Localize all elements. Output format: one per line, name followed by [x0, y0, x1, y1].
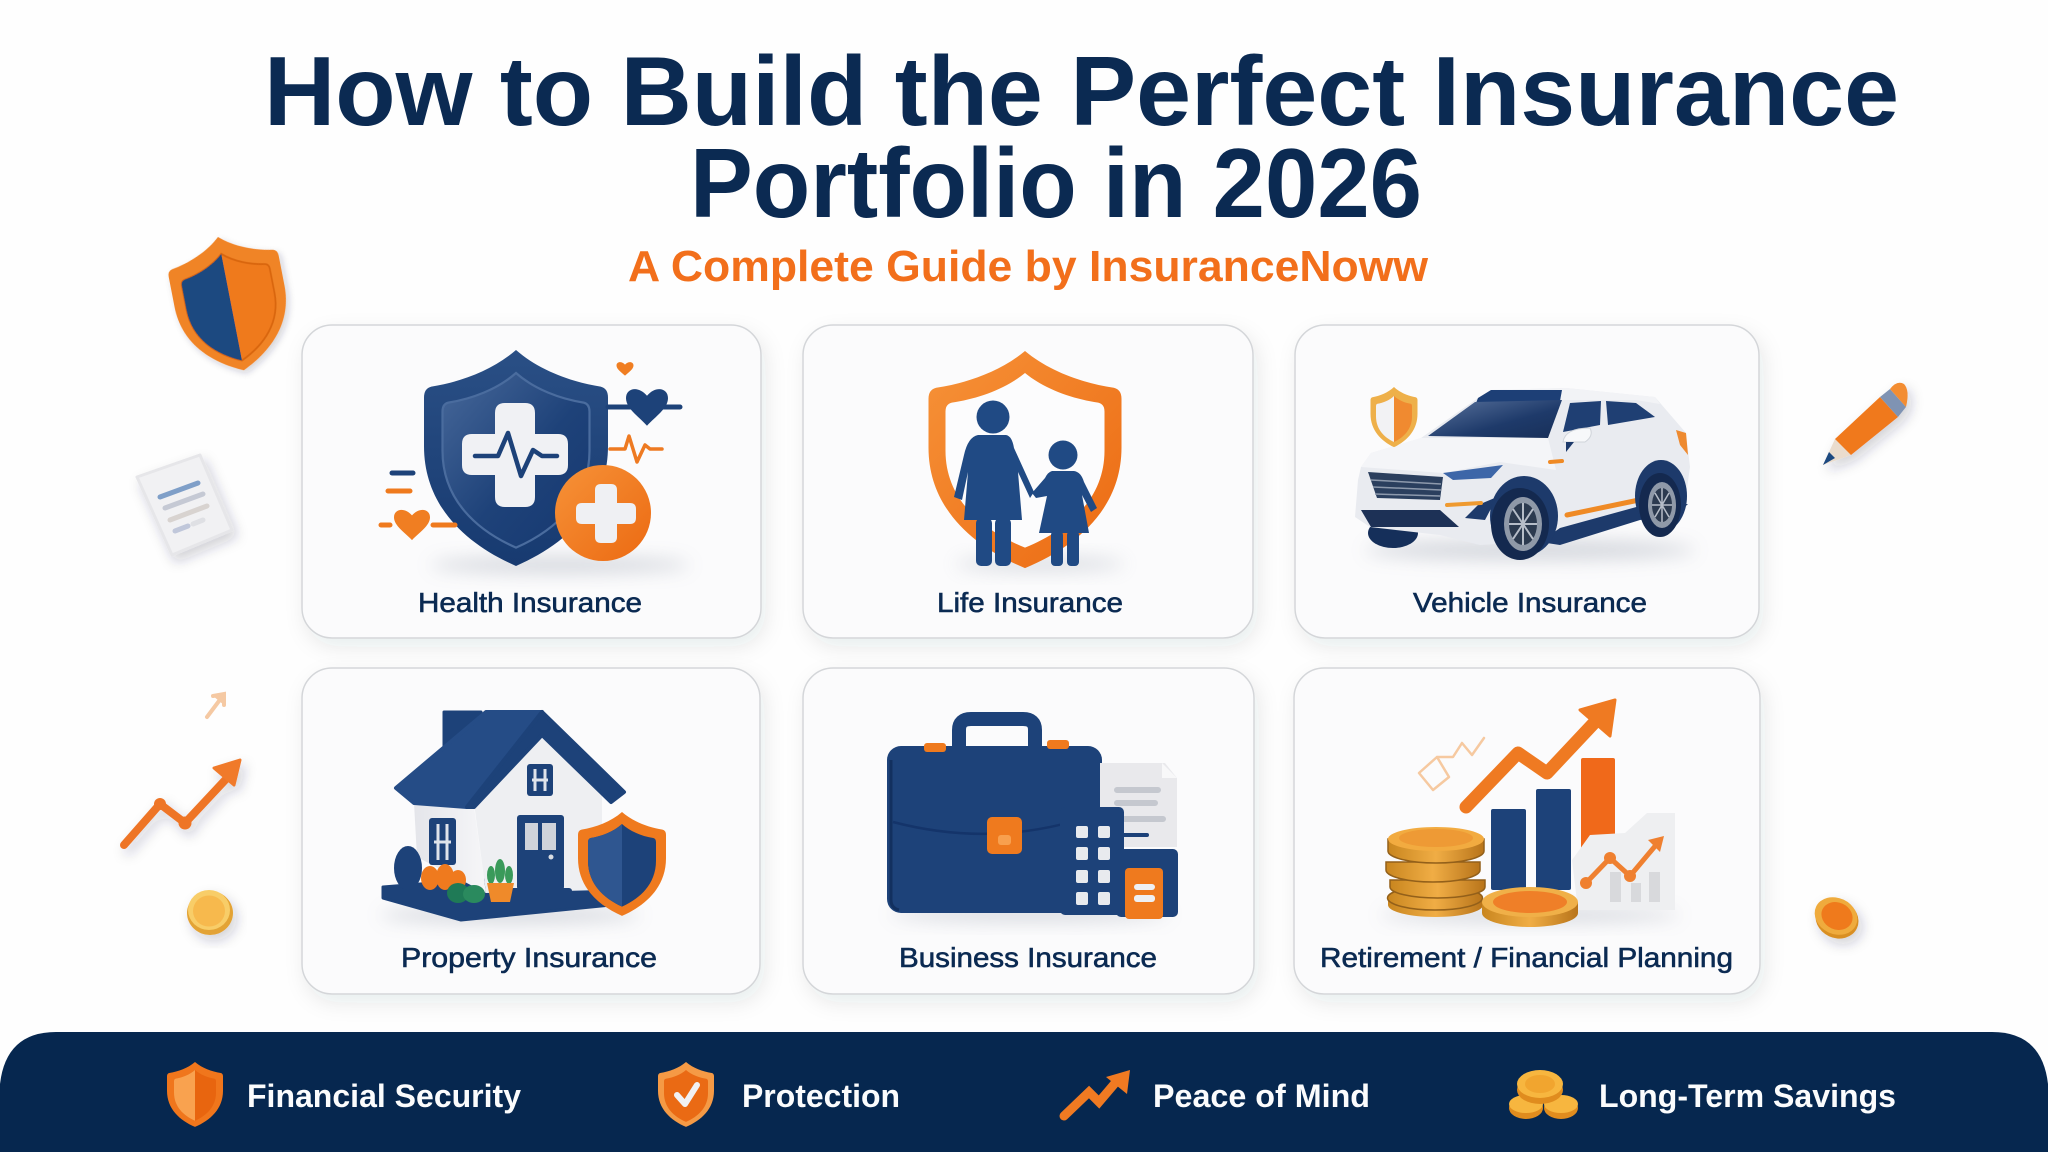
- benefit: long-term savings: [1509, 1070, 1896, 1119]
- icon: briefcase with buildings: [887, 719, 1178, 921]
- panel: property insurance: [302, 668, 760, 994]
- decorative icon: document: [137, 455, 232, 555]
- icon: small gold shield: [1370, 387, 1418, 447]
- label: business insurance: Business Insurance: [899, 942, 1157, 973]
- icon: family in shield: [928, 351, 1125, 571]
- benefit: peace of mind: Peace of Mind: [1153, 1078, 1370, 1114]
- title: How to Build the Perfect Insurance: [264, 36, 1899, 146]
- title: Portfolio in 2026: [690, 128, 1422, 238]
- panel: retirement and financial planning: [1294, 668, 1760, 994]
- icon: car: [1355, 388, 1695, 560]
- icon: shield: [167, 1062, 223, 1127]
- icon: rising arrow: [1064, 1070, 1130, 1116]
- panel: vehicle insurance: [1295, 325, 1759, 638]
- label: retirement and financial planning: Retirement / Financial Planning: [1320, 942, 1733, 973]
- panel: business insurance: [803, 668, 1254, 994]
- icon: house with shield: [380, 712, 666, 923]
- icon: growth chart with coins: [1380, 700, 1680, 927]
- benefit: financial security: Financial Security: [247, 1078, 521, 1114]
- benefit: financial security: [167, 1062, 521, 1127]
- icon: coins: [1509, 1070, 1578, 1119]
- subtitle: A Complete Guide by InsuranceNoww: [628, 242, 1429, 291]
- panel: life insurance: [803, 325, 1253, 638]
- label: health insurance: Health Insurance: [418, 587, 642, 618]
- label: life insurance: Life Insurance: [937, 587, 1123, 618]
- icon: shield with check: [658, 1062, 714, 1127]
- decorative icon: shield: [163, 226, 299, 381]
- decorative icon: orange coin: [1808, 890, 1865, 946]
- decorative icon: pencil: [1823, 383, 1908, 465]
- decorative icon: gold coin: [187, 890, 233, 935]
- label: property insurance: Property Insurance: [401, 942, 657, 973]
- panel: health insurance: [302, 325, 761, 638]
- decorative icon: trend arrow: [124, 760, 240, 845]
- benefit: peace of mind: [1064, 1070, 1370, 1116]
- decorative icon: small arrow: [207, 694, 224, 717]
- icon: health shield with cross: [381, 350, 690, 573]
- title: [264, 36, 1899, 238]
- label: vehicle insurance: Vehicle Insurance: [1413, 587, 1647, 618]
- benefit: long-term savings: Long-Term Savings: [1599, 1078, 1896, 1114]
- benefit: protection: Protection: [742, 1078, 900, 1114]
- footer band: [0, 1032, 2048, 1152]
- benefit: protection: [658, 1062, 900, 1127]
